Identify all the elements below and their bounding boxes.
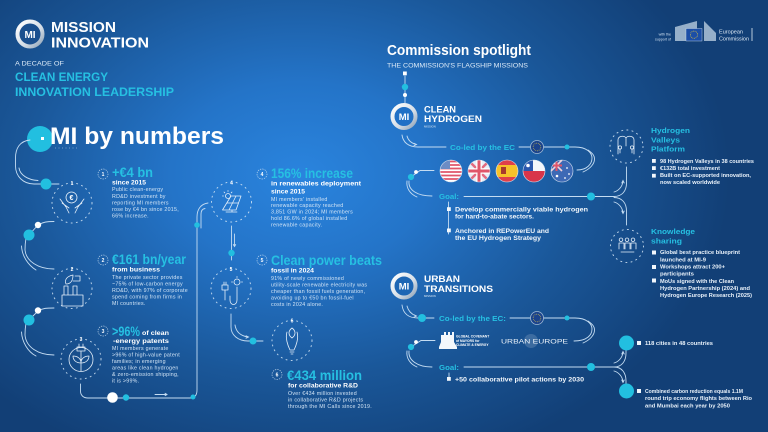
- logo: MI mission: MI: [399, 112, 409, 123]
- heading: knowledge sharing: [651, 227, 695, 246]
- icon: factory with leaf: 2: [71, 267, 74, 273]
- list: hydrogen valleys facts: 98 Hydrogen Valleys in 38 countries: [660, 159, 754, 165]
- outcome: carbon reduction: and Mumbai each year by 2050: [645, 403, 730, 409]
- timeline path: urban: [402, 305, 626, 389]
- number badge 5: [257, 255, 267, 265]
- panel: stat 4 renewables deployment: [212, 166, 362, 228]
- logo: Mission Innovation: MI: [24, 30, 36, 41]
- heading: Commission spotlight: [387, 43, 531, 70]
- flag: USA: [440, 160, 462, 182]
- title: a decade of clean energy innovation leadership: CLEAN ENERGY: [15, 72, 108, 84]
- stat body: The private sector provides: [112, 275, 183, 281]
- stat heading clean power beats: Clean power beats: [271, 253, 382, 268]
- logo: Mission Innovation: MISSION: [51, 20, 116, 36]
- heading: hydrogen valleys platform: Valleys: [651, 136, 680, 144]
- panel: stat 1 public investment: [52, 165, 179, 223]
- timeline path: hydrogen: [402, 135, 626, 234]
- logo: Mission Innovation: [18, 20, 149, 52]
- stat body: [112, 187, 179, 220]
- panel: stat 5 clean power beats fossil: [211, 253, 382, 308]
- list: knowledge sharing facts: MoUs signed with the Clean: [660, 279, 734, 285]
- icon: plug with leaves: 3: [80, 337, 83, 343]
- mission name: urban transitions: TRANSITIONS: [424, 284, 493, 295]
- outcome: carbon reduction: round trip economy flights between Rio: [645, 396, 752, 402]
- icon: EU flag circle: [530, 140, 544, 154]
- logo: Mission Innovation: INNOVATION: [51, 36, 149, 52]
- panel: hydrogen valleys platform: [610, 126, 754, 186]
- stat body: areas like clean hydrogen: [112, 366, 179, 372]
- stat body: through the MI Calls since 2019.: [288, 404, 372, 410]
- stat heading >96% of clean-energy patents: of clean: [142, 330, 169, 337]
- stat subheading: from business: [112, 266, 161, 274]
- list: knowledge sharing facts: Workshops attract 200+: [660, 264, 725, 270]
- logo: global covenant of mayors: CLIMATE & ENERGY: [456, 343, 489, 347]
- stat heading 156% increase: 156% increase: [271, 166, 353, 181]
- icon: hands holding euro: 1: [71, 181, 74, 187]
- logo: EU Commission support: support of: [655, 38, 671, 42]
- logo: urban europe: URBAN EUROPE: [501, 338, 569, 346]
- list: hydrogen valleys facts: [652, 159, 754, 186]
- stat body: it is >99%.: [112, 378, 139, 384]
- stat body: RD&D, with 97% of corporate: [112, 288, 188, 294]
- stat body: & zero-emission shipping,: [112, 372, 179, 378]
- number badge 4: 4: [261, 172, 264, 178]
- number badge 5: 5: [261, 258, 264, 264]
- flag: Spain: [496, 160, 518, 182]
- icon: solar panel: 4: [230, 180, 233, 186]
- stat body: Over €434 million invested: [288, 391, 357, 397]
- flags: co-leading countries: [440, 160, 573, 182]
- timeline path: left journey: [16, 140, 263, 403]
- goals list: the EU Hydrogen Strategy: [455, 235, 542, 242]
- mission name: urban transitions: [424, 274, 493, 298]
- stat body: [112, 346, 180, 384]
- mission name: urban transitions: URBAN: [424, 274, 460, 285]
- label: goal: Goal:: [439, 192, 459, 201]
- stat body: renewable capacity reached: [271, 203, 343, 209]
- number badge 2: 2: [102, 258, 105, 264]
- heading: Commission spotlight: Commission spotlight: [387, 43, 531, 59]
- stat heading >96% of clean-energy patents: -energy patents: [113, 338, 169, 345]
- icon: hydrogen valleys: [610, 130, 643, 163]
- stat body: renewable capacity.: [271, 222, 322, 228]
- flag: UK: [468, 160, 490, 182]
- panel: clean hydrogen mission: [392, 72, 626, 242]
- number badge 4: [257, 169, 267, 179]
- icon: EU flag circle: [530, 312, 544, 324]
- list: knowledge sharing facts: Hydrogen Europe Research (2025): [660, 293, 752, 299]
- stat body: avoiding up to €50 bn fossil-fuel: [271, 296, 354, 302]
- title: a decade of clean energy innovation leadership: INNOVATION LEADERSHIP: [15, 87, 174, 99]
- outcome: carbon reduction: Combined carbon reduction equals 1.1M: [645, 389, 743, 395]
- icon: plug and sun: 5: [230, 267, 233, 273]
- stat subheading: since 2015: [112, 180, 147, 186]
- connector dots above logo: [402, 72, 408, 103]
- logo: global covenant of mayors: GLOBAL COVENANT: [456, 334, 489, 338]
- stat body: Public clean-energy: [112, 187, 163, 193]
- stat body: [288, 391, 372, 410]
- mission name: urban transitions: MISSION: [424, 294, 436, 298]
- number badge 6: 6: [276, 372, 279, 378]
- stat subheading: [271, 180, 362, 195]
- stat subheading: fossil in 2024: [271, 267, 315, 274]
- flag: Chile: [523, 160, 545, 182]
- mission name: clean hydrogen: [424, 104, 482, 128]
- stat body: spend coming from firms in: [112, 294, 182, 300]
- stat body: 3,851 GW in 2024; MI members: [271, 210, 353, 216]
- icon: people meeting: [610, 230, 644, 262]
- logo: EU Commission support: [655, 21, 752, 42]
- stat body: cheaper than fossil fuels generation,: [271, 289, 365, 295]
- stat heading +€4 bn: +€4 bn: [112, 165, 153, 180]
- heading: MI by numbers: MI by numbers: [50, 123, 224, 150]
- goals list: [447, 206, 588, 242]
- panel: knowledge sharing: [610, 227, 752, 299]
- stat subheading: since 2015: [271, 188, 306, 195]
- number badge 1: 1: [102, 172, 105, 178]
- list: knowledge sharing facts: [652, 250, 752, 299]
- heading: hydrogen valleys platform: Hydrogen: [651, 126, 690, 135]
- stat body: MI members' installed: [271, 197, 328, 203]
- goals list: Anchored in REPowerEU and: [455, 228, 549, 235]
- panel: urban outcomes: [619, 336, 752, 409]
- stat body: in collaborative R&D projects: [288, 397, 363, 403]
- stat heading >96% of clean-energy patents: [112, 324, 169, 345]
- number badge 3: 3: [102, 329, 105, 335]
- outcome: cities: 118 cities in 48 countries: [645, 341, 713, 347]
- heading: Commission spotlight: THE COMMISSION'S FLAGSHIP MISSIONS: [387, 62, 529, 70]
- heading: hydrogen valleys platform: Platform: [651, 144, 685, 154]
- logo: MI mission: [392, 274, 416, 298]
- label: co-led by the EC: Co-led by the EC:: [439, 314, 506, 323]
- stat heading >96% of clean-energy patents: >96%: [112, 324, 140, 339]
- icon: lightbulb with leaves: 6: [291, 318, 294, 324]
- panel: urban transitions mission: [392, 274, 626, 389]
- mission name: clean hydrogen: CLEAN: [424, 104, 456, 116]
- logo: urban europe: [501, 334, 569, 348]
- stat body: 91% of newly commissioned: [271, 276, 344, 282]
- stat body: families; in emerging: [112, 359, 166, 365]
- list: knowledge sharing facts: participants: [660, 272, 694, 278]
- title: a decade of clean energy innovation leadership: A DECADE OF: [15, 60, 64, 68]
- stat body: 66% increase.: [112, 214, 149, 220]
- flag: Australia: [551, 160, 573, 182]
- stat body: hold 86.6% of global installed: [271, 216, 347, 222]
- heading: knowledge sharing: Knowledge: [651, 227, 695, 236]
- stat heading €434 million: €434 million: [287, 368, 362, 383]
- list: knowledge sharing facts: launched at MI-9: [660, 257, 706, 263]
- list: knowledge sharing facts: Global best practice blueprint: [660, 250, 740, 256]
- stat body: MI countries.: [112, 301, 146, 307]
- stat body: >96% of high-value patent: [112, 352, 180, 358]
- heading: hydrogen valleys platform: [651, 126, 690, 154]
- logo: EU Commission support: Commission: [719, 36, 749, 42]
- stat body: [112, 275, 188, 307]
- stat body: costs in 2024 alone.: [271, 302, 323, 308]
- logo: MI mission: MI: [399, 282, 409, 292]
- stat subheading: in renewables deployment: [271, 180, 362, 187]
- outcome dots: [619, 336, 634, 398]
- stat body: rose by €4 bn since 2015,: [112, 207, 179, 213]
- list: hydrogen valleys facts: €132B total investment: [660, 166, 720, 172]
- icon: plug and sun: [211, 267, 251, 308]
- heading: knowledge sharing: sharing: [651, 236, 682, 246]
- panel: stat 6 collaborative R&D: [272, 318, 372, 410]
- stat body: utility-scale renewable electricity was: [271, 282, 367, 288]
- panel: stat 2 from business: [52, 252, 188, 308]
- list: hydrogen valleys facts: now scaled worldwide: [660, 180, 720, 186]
- stat body: RD&D investment by: [112, 194, 166, 200]
- label: goal: Goal:: [439, 363, 459, 372]
- goal item: +50 collaborative pilot actions by 2030: [455, 376, 585, 383]
- logo: global covenant of mayors: [439, 332, 489, 349]
- outcome: carbon reduction: [637, 389, 752, 409]
- stat body: MI members generate: [112, 346, 169, 352]
- stat body: [271, 276, 367, 308]
- logo: EU Commission support: with the: [659, 32, 671, 36]
- goals list: for hard-to-abate sectors.: [455, 214, 534, 221]
- logo: MI mission: [392, 105, 416, 128]
- stat body: [271, 197, 353, 228]
- panel: stat 3 clean-energy patents: [61, 324, 180, 384]
- mission name: clean hydrogen: MISSION: [424, 124, 436, 128]
- stat heading €161 bn/year: €161 bn/year: [112, 252, 187, 267]
- icon: solar panel: [212, 180, 252, 222]
- icon: hands holding euro: €: [70, 195, 74, 202]
- stat subheading: for collaborative R&D: [288, 382, 358, 389]
- stat body: reporting MI members: [112, 200, 169, 206]
- icon: hands holding euro: [52, 181, 92, 223]
- logo: EU Commission support: European: [719, 30, 743, 36]
- mission name: clean hydrogen: HYDROGEN: [424, 114, 482, 125]
- logo: global covenant of mayors: of MAYORS for: [456, 339, 480, 343]
- goals list: Develop commercially viable hydrogen: [455, 206, 588, 214]
- label: co-led by the EC: Co-led by the EC: [450, 143, 516, 152]
- title: a decade of clean energy innovation leadership: [15, 60, 174, 99]
- stat body: ~75% of low-carbon energy: [112, 282, 183, 288]
- list: hydrogen valleys facts: Built on EC-supported innovation,: [660, 173, 752, 179]
- list: knowledge sharing facts: Hydrogen Partnership (2024) and: [660, 286, 750, 292]
